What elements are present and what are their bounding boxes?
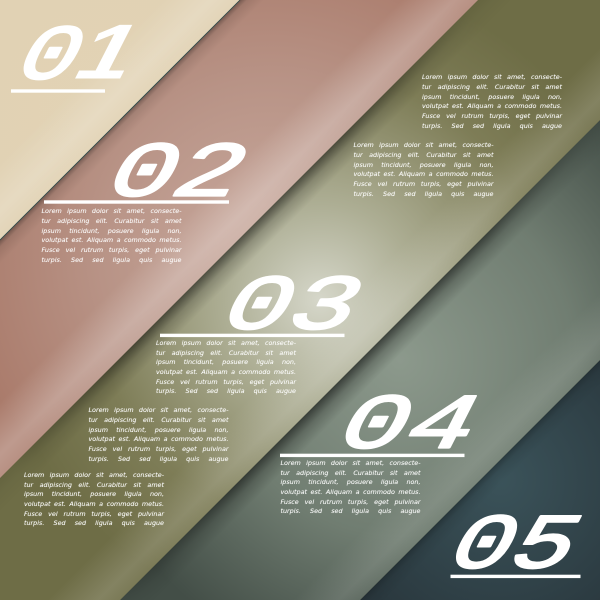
text block: section 04: tur adipiscing elit. Curabitur sit amet [280, 469, 420, 477]
text block: section 03: Lorem ipsum dolor sit amet, consecte- [156, 339, 296, 347]
text block: lower left: ipsum tincidunt, posuere ligula non, [24, 490, 164, 498]
text block: section 03: ipsum tincidunt, posuere ligula non, [156, 358, 296, 366]
band 1: cream [0, 0, 240, 240]
text block: lower left: Lorem ipsum dolor sit amet, consecte- [24, 471, 164, 479]
text block: section 02: turpis. Sed sed ligula quis augue [42, 256, 182, 264]
text block: lower left: Fusce vel rutrum turpis, eget pulvinar [24, 510, 164, 518]
text block: section 02: ipsum tincidunt, posuere ligula non, [42, 227, 182, 235]
number 04 with rule: 04 [320, 383, 498, 471]
text block: middle right: Fusce vel rutrum turpis, eget pulvinar [354, 180, 494, 188]
text block: lower middle: volutpat est. Aliquam a commodo metus. [88, 435, 228, 443]
number 02 with rule: 02 [89, 131, 265, 219]
text block: middle right: turpis. Sed sed ligula quis augue [354, 190, 494, 198]
text block: upper right: tur adipiscing elit. Curabitur sit amet [422, 83, 562, 91]
text block: lower middle: tur adipiscing elit. Curabitur sit amet [88, 416, 228, 424]
text block: section 04: volutpat est. Aliquam a commodo metus. [280, 488, 420, 496]
text block: section 04 [280, 459, 421, 515]
text block: upper right: Lorem ipsum dolor sit amet, consecte- [422, 73, 562, 81]
number 01 with rule: 01 [0, 7, 159, 102]
text block: middle right: ipsum tincidunt, posuere ligula non, [354, 161, 494, 169]
text block: section 03: volutpat est. Aliquam a commodo metus. [156, 368, 296, 376]
text block: middle right: Lorem ipsum dolor sit amet, consecte- [354, 141, 494, 149]
text block: lower middle: ipsum tincidunt, posuere ligula non, [88, 426, 228, 434]
text block: upper right [422, 73, 562, 130]
text block: lower left: tur adipiscing elit. Curabitur sit amet [24, 481, 164, 489]
text block: section 03: turpis. Sed sed ligula quis augue [156, 387, 296, 395]
text block: section 03 [156, 339, 296, 395]
text block: section 02: tur adipiscing elit. Curabitur sit amet [42, 217, 182, 225]
text block: lower middle: Fusce vel rutrum turpis, eget pulvinar [88, 445, 228, 453]
text block: lower left: volutpat est. Aliquam a commodo metus. [24, 500, 164, 508]
band 5: dark teal [360, 360, 600, 600]
text block: upper right: ipsum tincidunt, posuere ligula non, [422, 93, 562, 101]
text block: section 02: Fusce vel rutrum turpis, eget pulvinar [42, 246, 182, 254]
text block: middle right [354, 141, 494, 198]
text block: lower left: turpis. Sed sed ligula quis augue [24, 519, 164, 527]
text block: section 02: volutpat est. Aliquam a commodo metus. [42, 236, 182, 244]
text block: section 04: Fusce vel rutrum turpis, eget pulvinar [280, 498, 420, 506]
text block: section 04: turpis. Sed sed ligula quis augue [280, 507, 420, 515]
text block: section 02 [42, 207, 182, 264]
text block: section 04: ipsum tincidunt, posuere ligula non, [280, 478, 420, 486]
text block: section 02: Lorem ipsum dolor sit amet, consecte- [42, 207, 182, 215]
text block: middle right: tur adipiscing elit. Curabitur sit amet [354, 151, 494, 159]
number 05 with rule: 05 [431, 503, 597, 591]
text block: upper right: volutpat est. Aliquam a commodo metus. [422, 102, 562, 110]
text block: lower middle: turpis. Sed sed ligula quis augue [88, 455, 228, 463]
text block: lower middle [88, 406, 229, 463]
text block: lower left [24, 471, 164, 527]
text block: upper right: turpis. Sed sed ligula quis augue [422, 122, 562, 130]
band 2: dusty rose [0, 0, 478, 478]
text block: section 03: Fusce vel rutrum turpis, eget pulvinar [156, 378, 296, 386]
text block: section 03: tur adipiscing elit. Curabitur sit amet [156, 349, 296, 357]
band 4: grey green [120, 120, 600, 600]
text block: lower middle: Lorem ipsum dolor sit amet, consecte- [88, 406, 228, 414]
text block: middle right: volutpat est. Aliquam a commodo metus. [354, 170, 494, 178]
text block: section 04: Lorem ipsum dolor sit amet, consecte- [280, 459, 420, 467]
text block: upper right: Fusce vel rutrum turpis, eget pulvinar [422, 112, 562, 120]
number 03 with rule: 03 [204, 264, 380, 352]
